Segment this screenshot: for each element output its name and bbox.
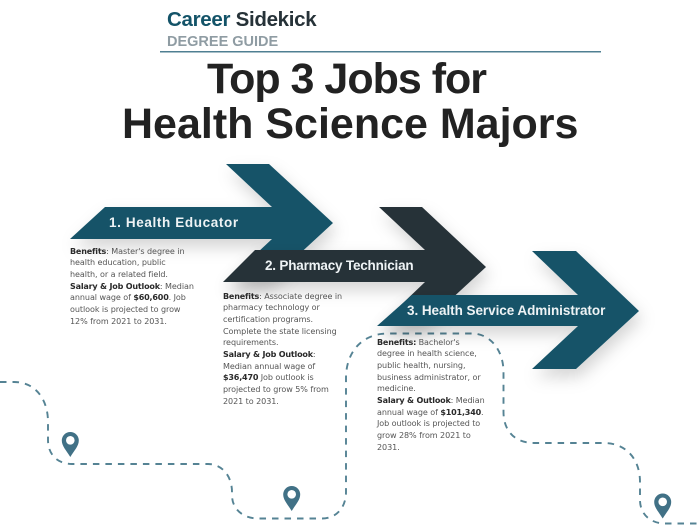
title: Health Science Majors xyxy=(122,100,578,148)
arrow 2 xyxy=(223,207,486,326)
text block: health educator xyxy=(70,246,194,326)
text block: health educator: Salary & Job Outlook: Median xyxy=(70,282,194,291)
icon: map pin 2 xyxy=(283,486,300,511)
text block: health educator: health education, public xyxy=(70,258,166,267)
text block: pharmacy technician: Benefits: Associate degree in xyxy=(223,292,342,300)
text block: pharmacy technician xyxy=(223,292,342,406)
text block: health service administrator xyxy=(376,338,485,452)
text block: health educator: Benefits: Master's degree in xyxy=(70,246,184,256)
text block: pharmacy technician: Complete the state licensing xyxy=(223,327,337,336)
text block: pharmacy technician: requirements. xyxy=(223,338,278,347)
text block: health service administrator: degree in health science, xyxy=(377,349,477,358)
text block: health service administrator: Benefits: Bachelor's xyxy=(377,338,460,346)
arrow 1 xyxy=(70,164,333,282)
text block: health service administrator: Job outlook is projected to xyxy=(377,419,480,428)
title xyxy=(122,55,578,148)
text block: pharmacy technician: pharmacy technology or xyxy=(223,303,320,312)
text block: health service administrator: medicine. xyxy=(377,384,416,393)
brand logo: Career Sidekick xyxy=(167,8,316,31)
arrow 3 xyxy=(377,251,639,369)
text block: pharmacy technician: 2021 to 2031. xyxy=(223,397,279,406)
text block: health service administrator: public health, nursing, xyxy=(377,361,465,370)
text block: pharmacy technician: certification programs. xyxy=(223,315,313,324)
text block: health service administrator: annual wage of $101,340. xyxy=(377,408,484,417)
arrow 1 heading: 1. Health Educator xyxy=(109,215,239,230)
text block: health service administrator: 2031. xyxy=(377,443,400,452)
degree guide label: DEGREE GUIDE xyxy=(167,34,278,50)
text block: health educator: outlook is projected to grow xyxy=(70,305,180,314)
icon: map pin 1 xyxy=(62,432,79,457)
icon: map pin 3 xyxy=(654,494,671,518)
text block: health service administrator: business administrator, or xyxy=(377,373,481,382)
text block: pharmacy technician: Salary & Job Outlook: xyxy=(223,350,316,359)
dashed route path xyxy=(0,334,700,524)
text block: health service administrator: Salary & Outlook: Median xyxy=(377,396,485,405)
text block: health service administrator: grow 28% from 2021 to xyxy=(377,431,471,440)
text block: pharmacy technician: $36,470 Job outlook is xyxy=(223,373,314,382)
text block: health educator: health, or a related field. xyxy=(70,270,168,279)
text block: pharmacy technician: projected to grow 5% from xyxy=(223,385,329,394)
arrow 2 heading: 2. Pharmacy Technician xyxy=(265,258,413,273)
header divider line xyxy=(160,51,601,52)
title: Top 3 Jobs for xyxy=(207,55,486,103)
text block: health educator: 12% from 2021 to 2031. xyxy=(70,317,167,326)
arrow 3 heading: 3. Health Service Administrator xyxy=(407,303,605,318)
text block: health educator: annual wage of $60,600. Job xyxy=(70,293,186,302)
text block: pharmacy technician: Median annual wage of xyxy=(223,362,315,371)
